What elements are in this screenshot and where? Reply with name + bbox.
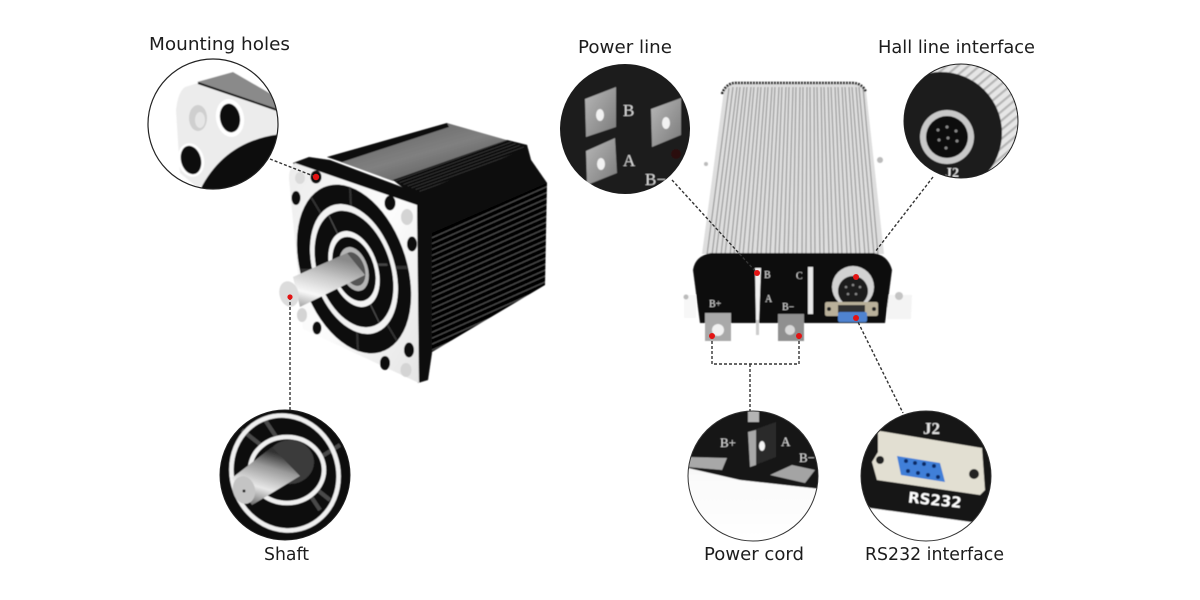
panel labels: B− (782, 302, 795, 313)
motor body top face (327, 123, 527, 181)
controller photo (684, 83, 912, 341)
callout: hall line interface: J2 (945, 166, 959, 181)
panel labels: A (765, 294, 773, 305)
infographic canvas (147, 36, 1034, 560)
callout: RS232 interface: RS232 (907, 488, 962, 512)
motor shaft (276, 253, 365, 309)
label: hall line interface: Hall line interface (878, 38, 1035, 58)
B- terminal (778, 314, 804, 341)
plate mounting holes (292, 170, 417, 377)
label: power cord: Power cord (704, 545, 804, 565)
panel labels: B+ (709, 299, 722, 310)
callout: mounting holes (147, 58, 279, 190)
motor front flange rim (293, 157, 432, 383)
callout: RS232 interface: J2 (923, 419, 940, 438)
motor top edge band (327, 123, 449, 162)
power slots (755, 267, 813, 335)
panel labels (709, 270, 803, 313)
heatsink fin lines (707, 87, 878, 255)
red marker dots (287, 174, 859, 339)
black front panel (693, 253, 892, 323)
callout: power line: A (623, 151, 636, 170)
label: shaft: Shaft (264, 545, 309, 565)
motor photo (276, 123, 547, 383)
finned aluminium heatsink (702, 83, 884, 254)
label: RS232 interface: RS232 interface (865, 545, 1004, 565)
silver front plate (289, 163, 419, 383)
label: mounting holes: Mounting holes (149, 35, 290, 55)
leader lines (270, 159, 933, 413)
callout: power cord: B+ (720, 435, 736, 450)
callout: power line: B− (645, 170, 666, 189)
controller mounting flange (684, 157, 912, 319)
RS232 connector (825, 302, 878, 322)
heatsink dark top edge (722, 83, 866, 94)
label: power line: Power line (578, 38, 672, 58)
motor body finned side (393, 140, 547, 383)
callout: shaft (220, 410, 350, 540)
callout: hall line interface (904, 64, 1018, 178)
motor upper fin block shading (393, 140, 547, 233)
callout: power line: B (623, 101, 634, 120)
hall connector (832, 266, 874, 308)
concentric rings on plate (293, 167, 415, 371)
panel labels: B (764, 270, 771, 281)
callout: power cord (688, 410, 818, 542)
callout: RS232 interface (860, 410, 992, 542)
panel labels: C (796, 271, 803, 282)
callout: power cord: A (781, 434, 791, 449)
motor upper fine fin strip (393, 140, 527, 192)
callout: power line (559, 63, 691, 195)
callout: power cord: B− (799, 450, 815, 465)
B+ terminal (705, 313, 731, 341)
